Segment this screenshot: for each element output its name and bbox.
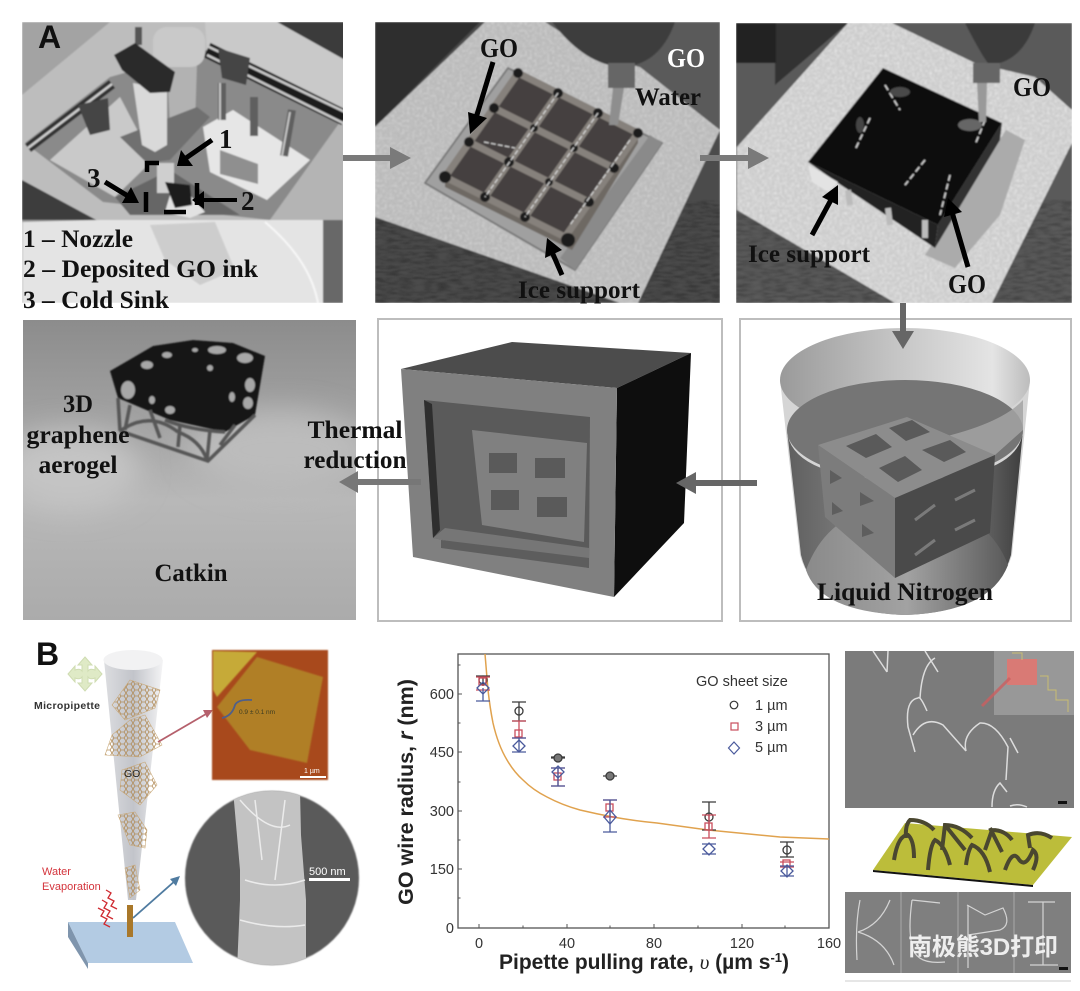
panel: frozen GO block photo: [736, 23, 1072, 310]
callouts: GO and ice support labels: Ice support: [518, 277, 641, 304]
nozzle: [965, 23, 1035, 122]
series: 3 um: [476, 677, 794, 867]
axis labels: 150: [430, 862, 454, 878]
label: thermal reduction: reduction: [304, 447, 407, 474]
heading: panel letter B: B: [36, 636, 59, 672]
callouts: GO and ice support labels: GO: [667, 43, 705, 73]
axis labels: 450: [430, 745, 454, 761]
text block: printer legend: [23, 226, 258, 314]
label: water evaporation: Water: [42, 866, 71, 878]
legend: [696, 674, 788, 756]
axis labels: 80: [646, 936, 662, 952]
illustration: micropipette with GO sheets: [104, 650, 163, 937]
axis title: y: GO wire radius, r (nm): [394, 679, 418, 905]
callouts: ice support and GO labels on block: GO: [1013, 72, 1051, 102]
illustration: wires on yellow substrate: [873, 820, 1072, 887]
callouts: GO and ice support labels: Water: [635, 84, 701, 111]
legend: GO sheet size: [696, 674, 788, 690]
rails: [28, 46, 345, 148]
series: 5 um: [476, 682, 794, 877]
text block: printer legend: 2 – Deposited GO ink: [23, 256, 258, 283]
panel: GO printing in water photo: [375, 22, 720, 310]
axis labels: 160: [817, 936, 841, 952]
frozen block: [808, 68, 1002, 248]
arrow: printer to water step: [343, 147, 411, 169]
text block: printer legend: 3 – Cold Sink: [23, 287, 169, 314]
white base with pillars: [203, 83, 310, 200]
panel: printer photo: [22, 22, 348, 303]
panel: liquid nitrogen container: [740, 319, 1071, 621]
legend: 5 µm: [755, 740, 788, 756]
callouts: printer numbered arrows: 3: [87, 163, 100, 193]
fit curve: [485, 654, 829, 839]
callouts: ice support and GO labels on block: [748, 72, 1051, 299]
arrow: frozen step to liquid nitrogen: [892, 303, 914, 349]
ice block: [818, 417, 995, 578]
arrow: red to AFM image: [158, 710, 213, 742]
image: AFM of GO sheet: [212, 650, 328, 780]
aerogel lattice: [110, 340, 265, 461]
arrow: furnace to aerogel: [339, 471, 421, 493]
image: SEM of GO wire: 500 nm: [309, 866, 346, 878]
axis labels: 40: [559, 936, 575, 952]
label: liquid nitrogen: Liquid Nitrogen: [817, 579, 993, 606]
syringe: [114, 27, 210, 208]
image: SEM of arched GO wires: [845, 651, 1074, 808]
axis labels: [430, 687, 841, 952]
axis labels: 0: [446, 921, 454, 937]
label: micropipette: Micropipette: [34, 700, 100, 712]
axis title: x: ): [782, 951, 789, 974]
icon: evaporation waves: [98, 890, 117, 927]
legend: 1 µm: [755, 698, 788, 714]
callouts: printer numbered arrows: 2: [241, 186, 254, 216]
panel: graphene aerogel on catkin photo: [0, 320, 370, 620]
series: 1 um: [476, 676, 794, 857]
label: water evaporation: [42, 866, 101, 893]
image: SEM of GO wire: [185, 790, 359, 970]
arrow: blue to SEM image: [133, 876, 180, 918]
printed GO lattice: [439, 68, 643, 250]
text block: aerogel labels: aerogel: [38, 452, 118, 479]
icon: movement cross: [68, 657, 102, 691]
watermark: 南极熊3D打印: [908, 934, 1058, 961]
axis title: x: -1: [770, 950, 782, 965]
label: water evaporation: Evaporation: [42, 881, 101, 893]
image: AFM of GO sheet: 0.9 ± 0.1 nm: [239, 709, 275, 716]
panel: thermal reduction furnace: [378, 319, 722, 621]
axis labels: 0: [475, 936, 483, 952]
axis labels: 300: [430, 804, 454, 820]
axis title: x: Pipette pulling rate, υ (µm s: [499, 950, 770, 974]
callouts: ice support and GO labels on block: Ice support: [748, 241, 871, 268]
image: AFM of GO sheet: 1 µm: [304, 768, 320, 775]
clamps: [78, 48, 250, 135]
axis labels: 120: [730, 936, 754, 952]
label: thermal reduction: Thermal: [308, 417, 403, 444]
label: thermal reduction: [304, 417, 407, 474]
inset with printed pattern: [982, 651, 1074, 715]
callouts: printer numbered arrows: [87, 124, 254, 216]
chart: GO wire radius vs pulling rate: [394, 654, 841, 974]
axis labels: 600: [430, 687, 454, 703]
illustration: substrate: [68, 922, 193, 969]
text block: aerogel labels: graphene: [26, 422, 130, 449]
callouts: printer numbered arrows: 1: [219, 124, 232, 154]
arrow: water to frozen step: [700, 147, 769, 169]
text block: aerogel labels: Catkin: [154, 560, 228, 587]
text block: aerogel labels: 3D: [63, 391, 93, 418]
label: GO: GO: [124, 768, 140, 780]
arrow: liquid nitrogen to furnace: [676, 472, 757, 494]
callouts: GO and ice support labels: [468, 33, 705, 304]
image: wires writing KERI: [845, 892, 1071, 973]
nozzle: [552, 22, 675, 125]
legend: 3 µm: [755, 719, 788, 735]
callouts: ice support and GO labels on block: GO: [948, 269, 986, 299]
text block: aerogel labels: [26, 391, 228, 587]
text block: printer legend: 1 – Nozzle: [23, 226, 133, 253]
callouts: GO and ice support labels: GO: [480, 33, 518, 63]
heading: panel letter A: A: [38, 19, 61, 55]
